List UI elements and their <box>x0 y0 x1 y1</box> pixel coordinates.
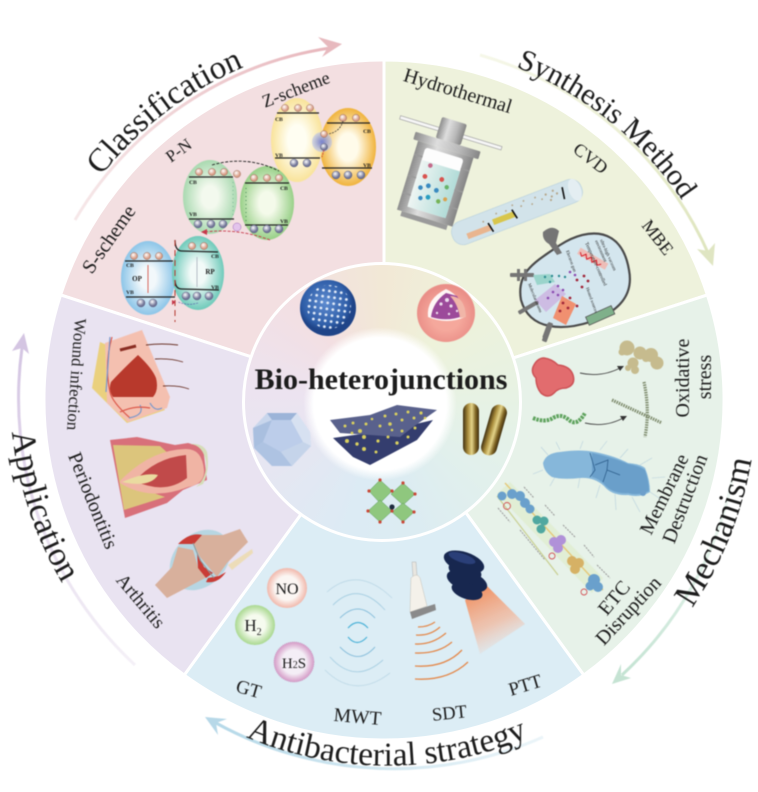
diagram: S-scheme band structure: RP <box>205 268 215 276</box>
icon: MBE chamber: Temperature-controlled <box>583 242 607 287</box>
icon: layered nanosheet <box>330 405 437 465</box>
icon: perovskite crystal <box>366 478 417 524</box>
icon: H2S bubble <box>274 642 314 682</box>
heading: Antibacterial strategy: Antibacterial strategy <box>246 720 523 766</box>
diagram: Z-scheme band structure: VB <box>363 163 371 169</box>
panel: antibacterial strategy <box>233 546 545 730</box>
label: Membrane Destruction: Destruction <box>658 451 712 546</box>
label: ETC Disruption: Disruption <box>591 572 666 650</box>
icon: H2S bubble: H2S <box>282 656 306 672</box>
label: Hydrothermal: Hydrothermal <box>401 64 515 118</box>
icon: blue polyhedron <box>253 413 311 466</box>
central ring disk <box>242 262 522 542</box>
arrow: antibacterial strategy <box>205 717 543 769</box>
label: CVD: CVD <box>570 139 612 178</box>
center white glow disc <box>303 327 457 481</box>
label: MBE: MBE <box>638 216 678 259</box>
diagram: P-N band structure: CB <box>189 180 197 186</box>
label: Arthritis: Arthritis <box>111 570 169 633</box>
diagram: S-scheme band structure: OP <box>132 275 143 283</box>
label: SDT: SDT <box>431 702 468 726</box>
label: PTT: PTT <box>506 671 545 701</box>
icon: MBE chamber: ultra-high vacuum <box>599 238 618 272</box>
icon: NO bubble <box>267 568 307 608</box>
icon: periodontitis tooth <box>110 437 208 518</box>
icon: blue porous sphere <box>300 280 356 336</box>
diagram: Z-scheme band structure: CB <box>275 117 283 123</box>
icon: arthritic knee joint <box>155 518 253 602</box>
icon: CVD tube <box>448 176 586 248</box>
label: Oxidative stress: stress <box>694 355 716 399</box>
diagram: S-scheme band structure: CB <box>211 254 219 260</box>
icon: photothermal lamp with beam <box>441 546 525 654</box>
label: Membrane Destruction: Membrane <box>636 451 694 538</box>
panel: classification <box>78 67 376 322</box>
label: S-scheme: S-scheme <box>78 201 140 278</box>
heading: Application: Application <box>8 432 74 584</box>
diagram: P-N band structure: CB <box>280 186 288 192</box>
panel: mechanism <box>497 338 716 650</box>
diagram: S-scheme band structure <box>121 236 224 322</box>
diagram: S-scheme band structure: VB <box>211 285 219 291</box>
icon: hydrothermal autoclave <box>373 105 505 238</box>
heading: Synthesis Method: Synthesis Method <box>518 50 698 200</box>
icon: H2 bubble: 2 <box>257 627 262 638</box>
label: Oxidative stress: Oxidative <box>672 338 694 417</box>
panel: central materials <box>253 280 509 524</box>
label: Z-scheme: Z-scheme <box>259 67 333 111</box>
arrow: application <box>12 333 135 665</box>
panel: synthesis method <box>373 64 678 342</box>
label: Wound infection: Wound infection <box>63 318 90 431</box>
diagram: P-N band structure: VB <box>189 212 197 218</box>
diagram: Z-scheme band structure: CB <box>363 129 371 135</box>
icon: electron transport chain <box>497 482 610 595</box>
icon: MBE chamber: environment <box>594 239 608 263</box>
diagram: P-N band structure <box>183 160 294 240</box>
label: GT: GT <box>233 676 264 703</box>
diagram: S-scheme band structure: VB <box>126 290 134 296</box>
icon: ruptured bacterium <box>533 441 665 512</box>
icon: oxidative protein damage <box>532 340 664 437</box>
diagram: Z-scheme band structure <box>271 98 376 186</box>
icon: MBE chamber: Heated sources <box>585 287 599 314</box>
label: Oxidative stress <box>672 338 716 417</box>
heading: Classification: Classification <box>88 54 244 172</box>
icon: wound skin section <box>92 330 189 423</box>
title: Bio-heterojunctions: Bio-heterojunctions <box>255 363 507 396</box>
label: Periodontitis: Periodontitis <box>63 449 122 552</box>
icon: MBE chamber: Electron gun <box>565 250 578 273</box>
heading: Mechanism: Mechanism <box>673 459 752 608</box>
icon: H2 bubble <box>235 605 275 645</box>
arrow: synthesis method <box>480 55 715 266</box>
icon: ultrasound probe and waves <box>410 562 468 679</box>
arrow: classification <box>75 37 342 220</box>
label: ETC Disruption: ETC <box>594 577 635 620</box>
diagram: S-scheme band structure: CB <box>126 263 134 269</box>
icon: H2 bubble: H <box>244 616 257 635</box>
diagram: P-N band structure: VB <box>280 219 288 225</box>
icon: MBE chamber: Molecular Beams <box>527 283 543 313</box>
arrow: mechanism <box>612 480 732 684</box>
label: Membrane Destruction <box>636 451 712 546</box>
icon: gold nanorods <box>463 403 509 457</box>
diagram: Z-scheme band structure: VB <box>275 153 283 159</box>
icon: NO bubble: NO <box>275 581 299 598</box>
label: P-N: P-N <box>162 135 195 166</box>
label: MWT: MWT <box>333 705 382 730</box>
icon: microwave arcs <box>325 580 392 686</box>
panel: application <box>63 318 253 633</box>
icon: MBE chamber <box>510 228 630 342</box>
icon: pink core-shell sphere <box>417 284 475 342</box>
